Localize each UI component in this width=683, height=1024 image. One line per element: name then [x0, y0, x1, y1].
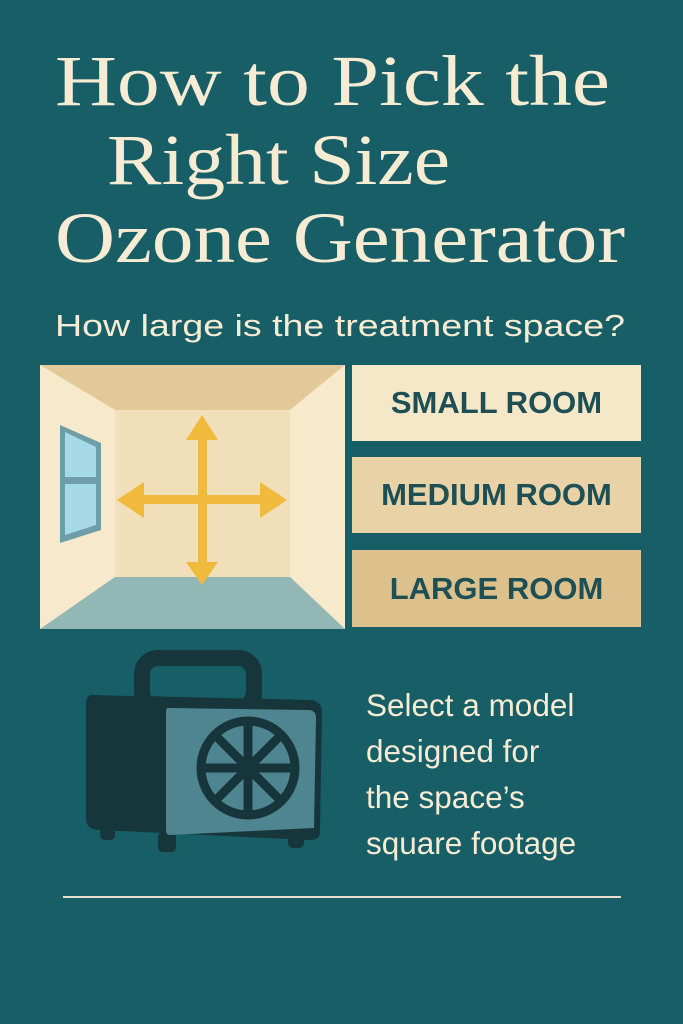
subtitle: How large is the treatment space?	[55, 308, 625, 343]
option: medium room	[352, 457, 641, 533]
option: small room	[352, 365, 641, 441]
text: select a model: square footage	[366, 825, 576, 861]
option: large room	[352, 550, 641, 627]
option: large room: LARGE ROOM	[390, 570, 603, 606]
title: Ozone Generator	[55, 198, 625, 278]
icon: ozone generator	[86, 650, 322, 852]
text: select a model	[366, 687, 576, 861]
title: Right Size	[107, 120, 450, 200]
title: How to Pick the	[55, 41, 610, 121]
text: select a model: the space’s	[366, 779, 525, 815]
icon: arrows	[117, 415, 287, 585]
icon: window	[60, 425, 101, 543]
title	[55, 41, 625, 278]
option: small room: SMALL ROOM	[391, 385, 602, 420]
text: select a model: designed for	[366, 733, 539, 769]
illustration: room with arrows	[40, 365, 345, 629]
option: medium room: MEDIUM ROOM	[381, 477, 612, 512]
text: select a model: Select a model	[366, 687, 574, 723]
